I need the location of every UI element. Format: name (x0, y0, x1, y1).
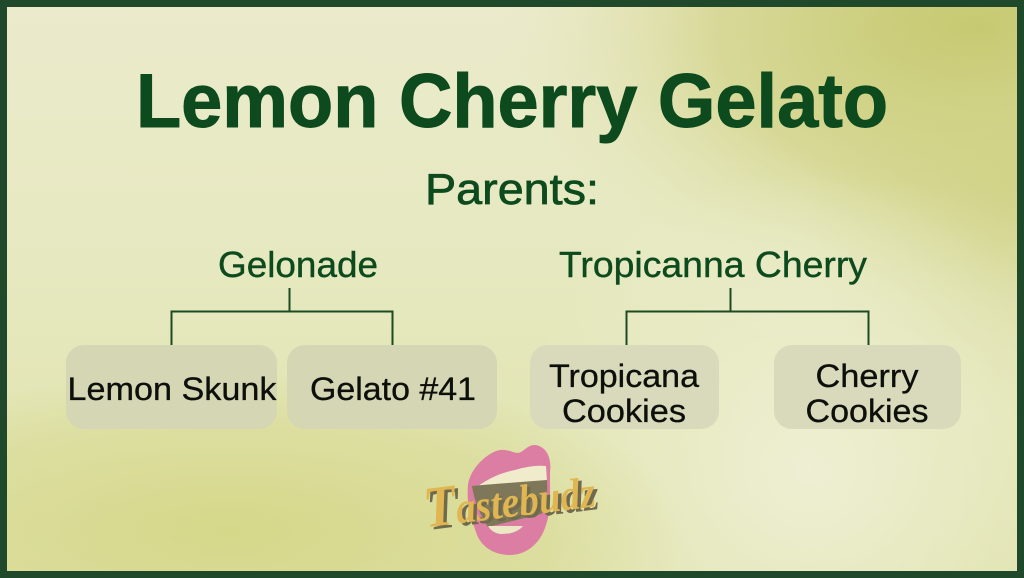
parent label: Tropicanna Cherry: Tropicanna Cherry (559, 244, 867, 285)
box: Tropicana Cookies: Tropicana (549, 358, 699, 394)
box: Lemon Skunk (66, 345, 278, 429)
connector: Tropicanna Cherry (626, 288, 868, 345)
box: Cherry Cookies: Cherry (816, 358, 918, 394)
box: Lemon Skunk: Lemon Skunk (68, 371, 278, 407)
connector: Gelonade (172, 288, 392, 345)
family tree: Tropicanna Cherry (530, 244, 961, 429)
logo wordmark: Tastebudz (420, 455, 598, 540)
icon: lips (468, 445, 550, 555)
parent label: Gelonade: Gelonade (218, 244, 378, 285)
box: Cherry Cookies (774, 345, 961, 429)
box: Tropicana Cookies: Cookies (562, 393, 686, 429)
title: Lemon Cherry Gelato (136, 59, 888, 144)
box: Tropicana Cookies (530, 345, 719, 429)
subtitle: parents: Parents: (425, 165, 599, 214)
box: Gelato #41: Gelato #41 (310, 371, 476, 407)
family tree: Gelonade (66, 244, 497, 429)
box: Cherry Cookies: Cookies (806, 393, 928, 429)
logo wordmark: Tastebudz (423, 457, 602, 543)
logo: Tastebudz lips (420, 445, 602, 555)
box: Gelato #41 (287, 345, 497, 429)
